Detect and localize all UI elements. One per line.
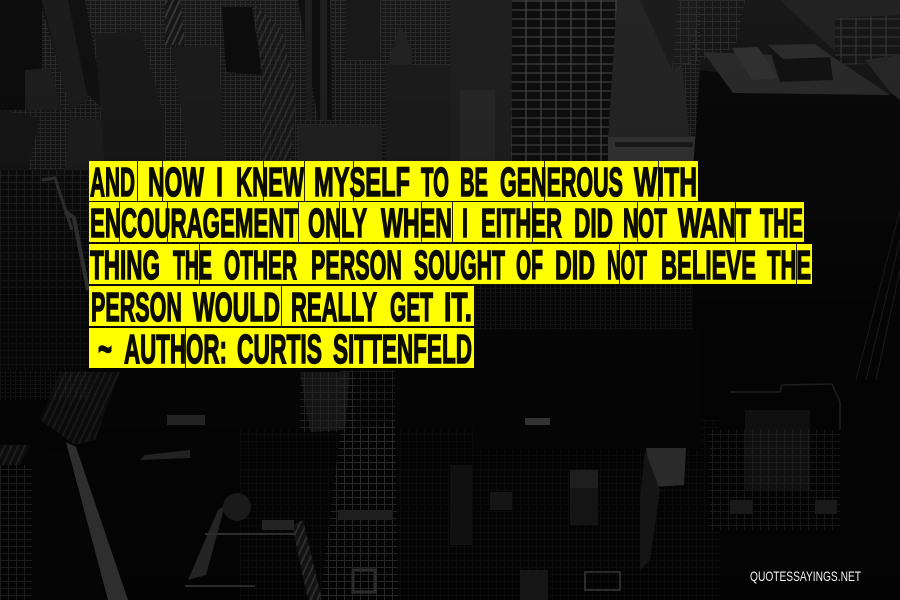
line 1 of quote: I bbox=[216, 159, 223, 205]
author line: SITTENFELD bbox=[333, 326, 472, 372]
line 4 of quote: WOULD bbox=[193, 284, 280, 330]
author line: ~ bbox=[98, 326, 112, 372]
line 2 of quote: I bbox=[462, 200, 468, 246]
line 2 of quote: ONLY bbox=[308, 200, 367, 246]
line 2 of quote: WHEN bbox=[381, 200, 452, 246]
line 2 of quote: WANT bbox=[678, 200, 751, 246]
line 4 of quote: REALLY bbox=[291, 284, 377, 330]
line 1 of quote bbox=[89, 159, 698, 205]
line 3 of quote: THING bbox=[90, 242, 160, 288]
line 2 of quote bbox=[89, 200, 804, 246]
line 2 of quote: DID bbox=[574, 200, 613, 246]
author line: CURTIS bbox=[237, 326, 322, 372]
line 2 of quote: EITHER bbox=[481, 200, 562, 246]
line 3 of quote: NOT bbox=[607, 242, 647, 288]
line 1 of quote: BE bbox=[460, 159, 488, 205]
line 3 of quote bbox=[89, 242, 812, 288]
quote block: yellow highlighted text bbox=[89, 159, 812, 372]
watermark: QUOTESSAYINGS.NET bbox=[750, 568, 861, 584]
line 4 of quote: PERSON bbox=[91, 284, 182, 330]
line 2 of quote: NOT bbox=[623, 200, 667, 246]
line 1 of quote: TO bbox=[421, 159, 449, 205]
line 3 of quote: OF bbox=[516, 242, 543, 288]
line 3 of quote: SOUGHT bbox=[414, 242, 505, 288]
line 3 of quote: PERSON bbox=[311, 242, 402, 288]
line 1 of quote: GENEROUS bbox=[500, 159, 623, 205]
line 3 of quote: THE bbox=[767, 242, 811, 288]
line 3 of quote: DID bbox=[555, 242, 595, 288]
line 4 of quote bbox=[89, 284, 474, 330]
line 3 of quote: THE bbox=[173, 242, 212, 288]
line 1 of quote: AND bbox=[90, 159, 135, 205]
line 4 of quote: IT. bbox=[444, 284, 472, 330]
author line: AUTHOR: bbox=[124, 326, 227, 372]
line 4 of quote: GET bbox=[390, 284, 433, 330]
line 3 of quote: OTHER bbox=[224, 242, 297, 288]
line 2 of quote: ENCOURAGEMENT bbox=[90, 200, 298, 246]
author line bbox=[89, 326, 474, 372]
line 1 of quote: WITH bbox=[634, 159, 697, 205]
line 1 of quote: KNEW bbox=[236, 159, 304, 205]
line 1 of quote: NOW bbox=[148, 159, 204, 205]
line 2 of quote: THE bbox=[760, 200, 803, 246]
line 1 of quote: MYSELF bbox=[314, 159, 410, 205]
line 3 of quote: BELIEVE bbox=[661, 242, 756, 288]
